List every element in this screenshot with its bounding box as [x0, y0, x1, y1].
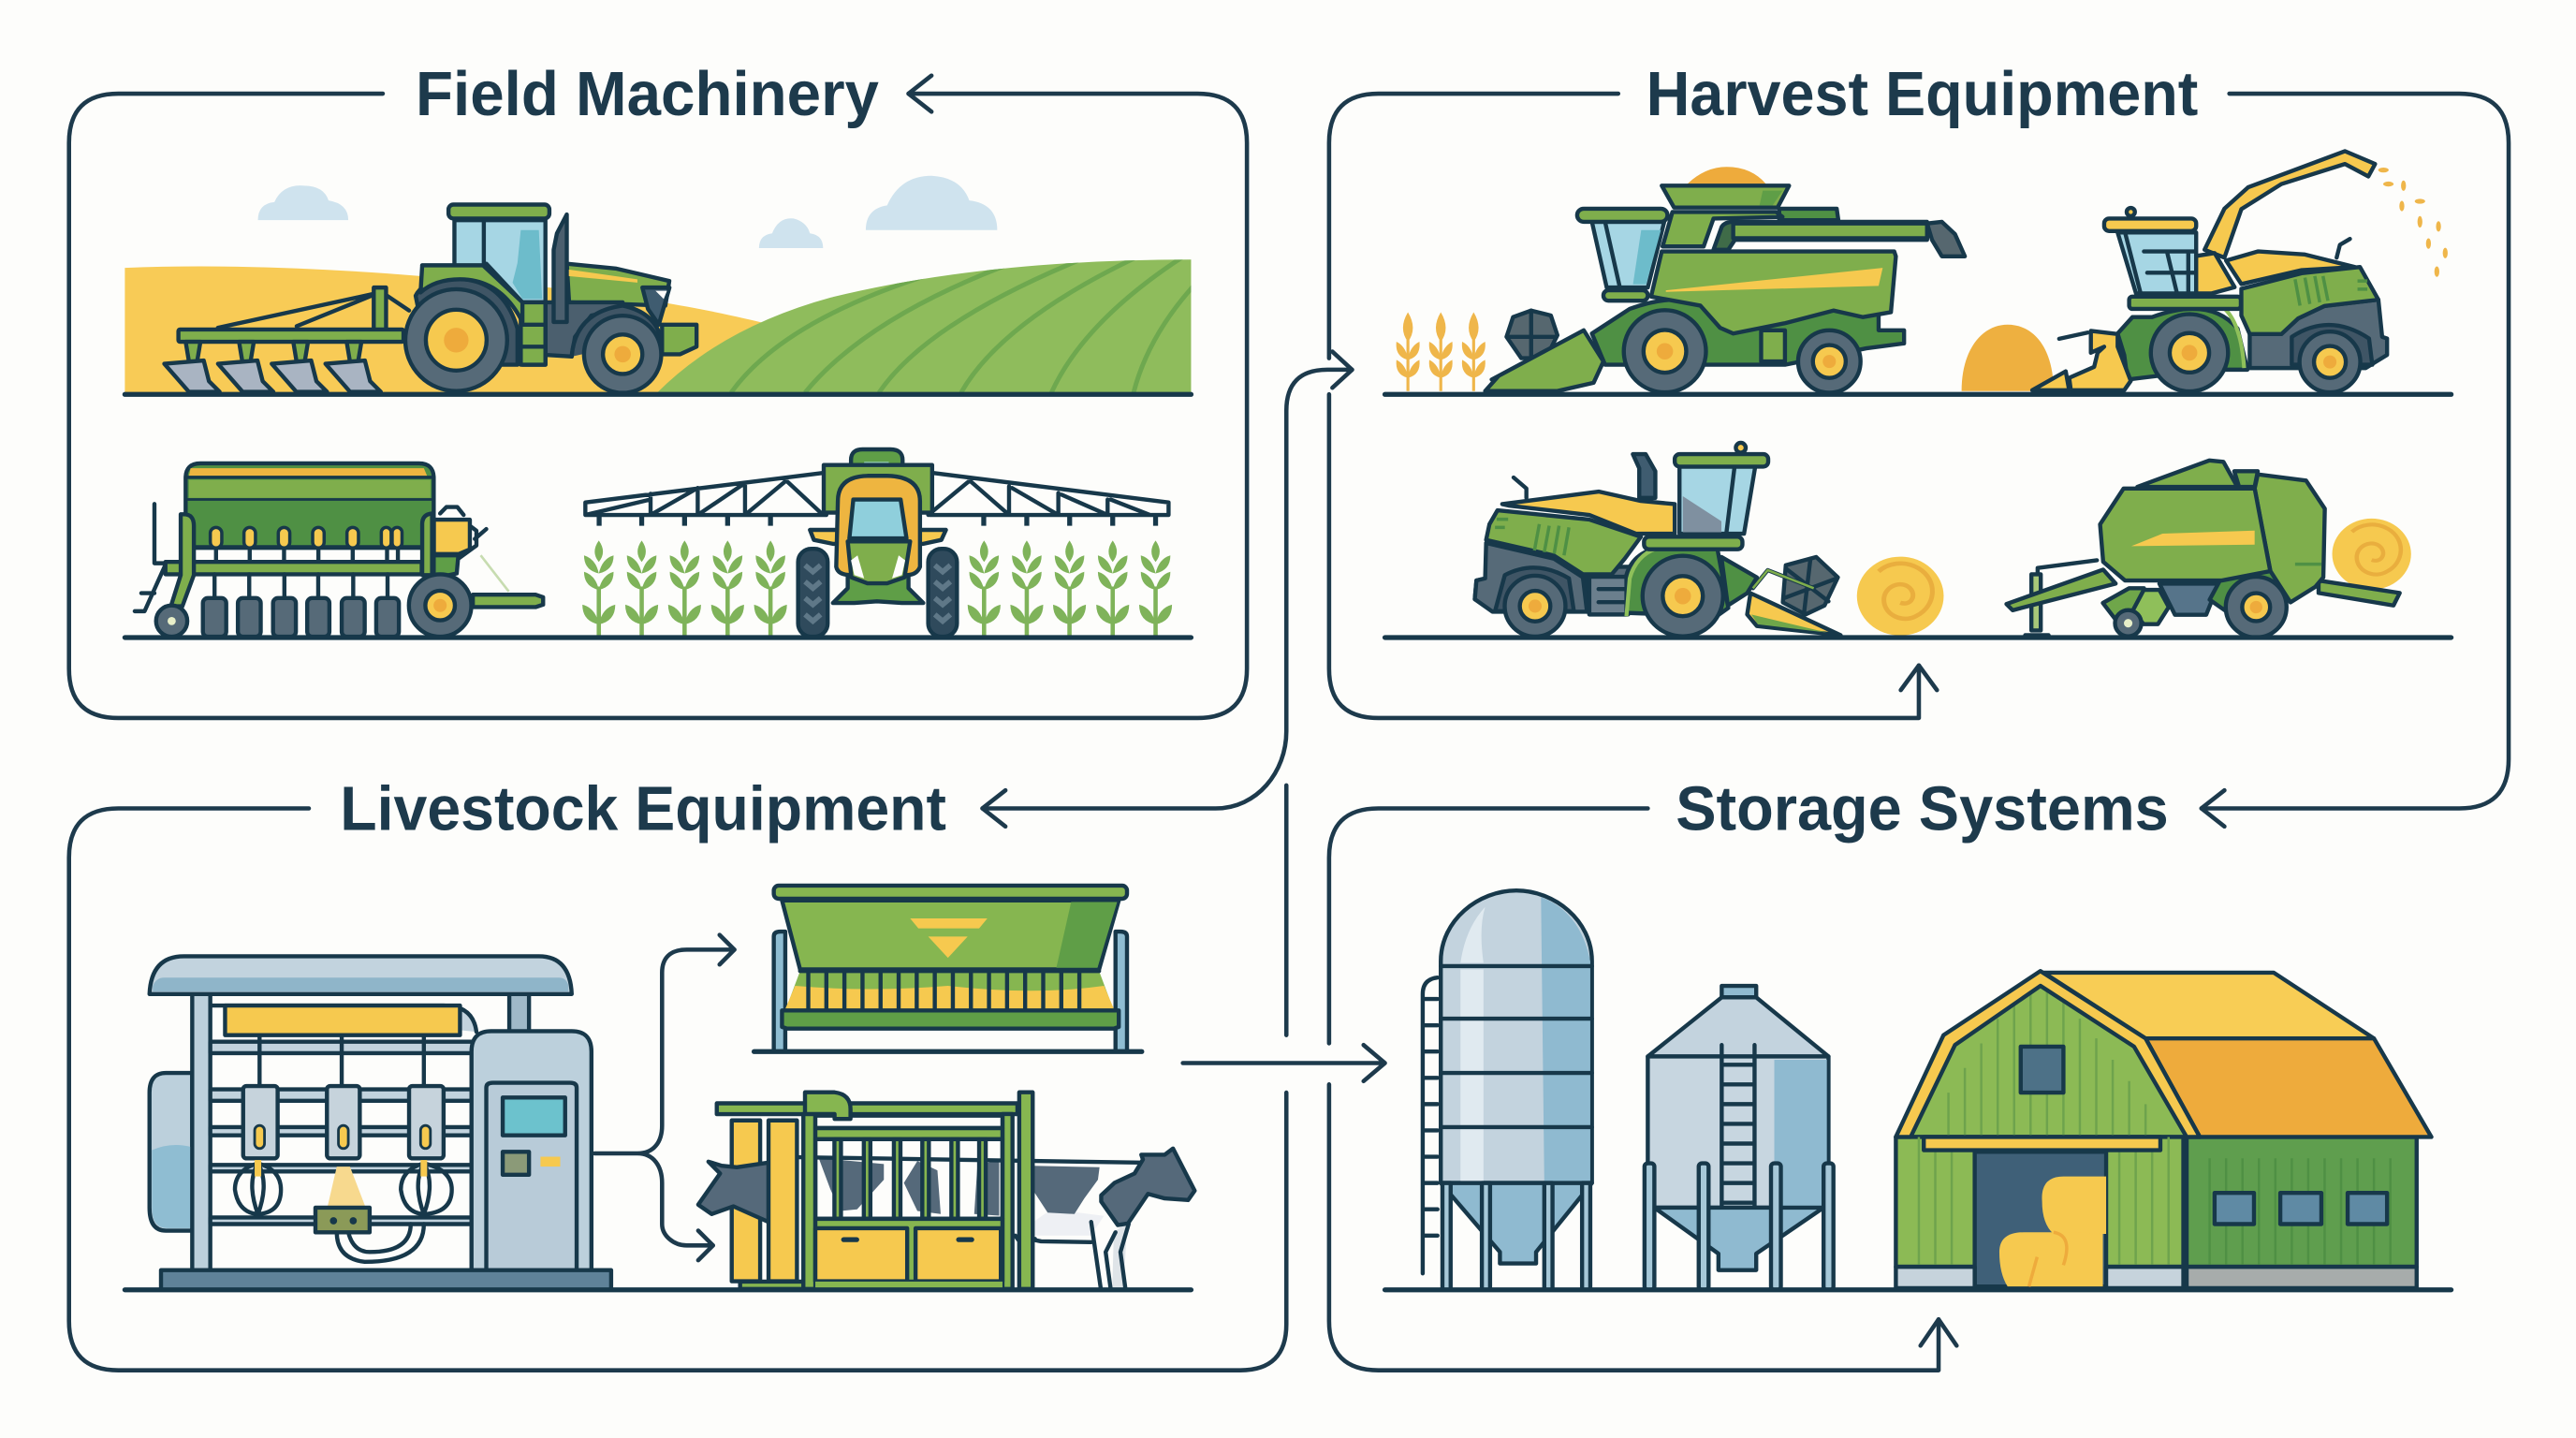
harvest frame [1329, 94, 2509, 808]
ground line [1385, 393, 2452, 396]
headlock gate [717, 1093, 1032, 1289]
arrow: up into harvest [1901, 666, 1937, 690]
panel: field machinery [69, 60, 1247, 718]
panel: livestock equipment [69, 352, 1385, 1371]
title: harvest equipment: Harvest Equipment [1647, 60, 2198, 129]
branching arrows [594, 935, 735, 1260]
milking robot [150, 956, 611, 1290]
round baler [2007, 461, 2400, 638]
combine harvester [1486, 167, 1965, 392]
sprayer [585, 449, 1168, 637]
cow [698, 1149, 1194, 1288]
wheat stalks [1397, 312, 1486, 391]
yellow boards rear [732, 1121, 760, 1282]
storage frame [1329, 808, 1939, 1371]
title: field machinery: Field Machinery [416, 60, 879, 129]
hay mound [1962, 325, 2054, 391]
hills with furrows [124, 255, 1208, 392]
title: livestock equipment: Livestock Equipment [340, 774, 946, 844]
arrow: livestock to storage [1183, 1045, 1385, 1081]
crop plants [582, 540, 1172, 636]
seed drill [135, 463, 543, 637]
barn [1895, 971, 2432, 1288]
arrow: into livestock [983, 790, 1005, 827]
clouds [258, 176, 997, 248]
connector: livestock to harvest [983, 370, 1352, 808]
livestock frame [69, 785, 1286, 1371]
ground line [754, 1050, 1142, 1053]
tall silo [1423, 890, 1592, 1290]
arrow: into field machinery [909, 76, 931, 111]
ground line [1385, 636, 2452, 638]
arrow: up into storage [1921, 1319, 1956, 1345]
panel: storage systems [1329, 774, 2452, 1371]
ground line [124, 1288, 1191, 1291]
feed trough [774, 886, 1127, 1051]
ground line [1385, 1288, 2452, 1291]
self-propelled forager [1475, 443, 1840, 637]
plough [165, 287, 409, 392]
conical silo [1645, 986, 1834, 1290]
arrow: into storage [2202, 790, 2224, 827]
title: storage systems: Storage Systems [1676, 774, 2169, 844]
panel: harvest equipment [1329, 60, 2509, 827]
arrow: into harvest [1332, 352, 1352, 388]
tractor [405, 205, 696, 393]
ground line [124, 636, 1191, 638]
field machinery frame [69, 94, 1247, 718]
round bale [1857, 557, 1943, 636]
rear bale [2333, 519, 2411, 590]
ground line [124, 393, 1191, 396]
forage harvester [2032, 151, 2448, 392]
